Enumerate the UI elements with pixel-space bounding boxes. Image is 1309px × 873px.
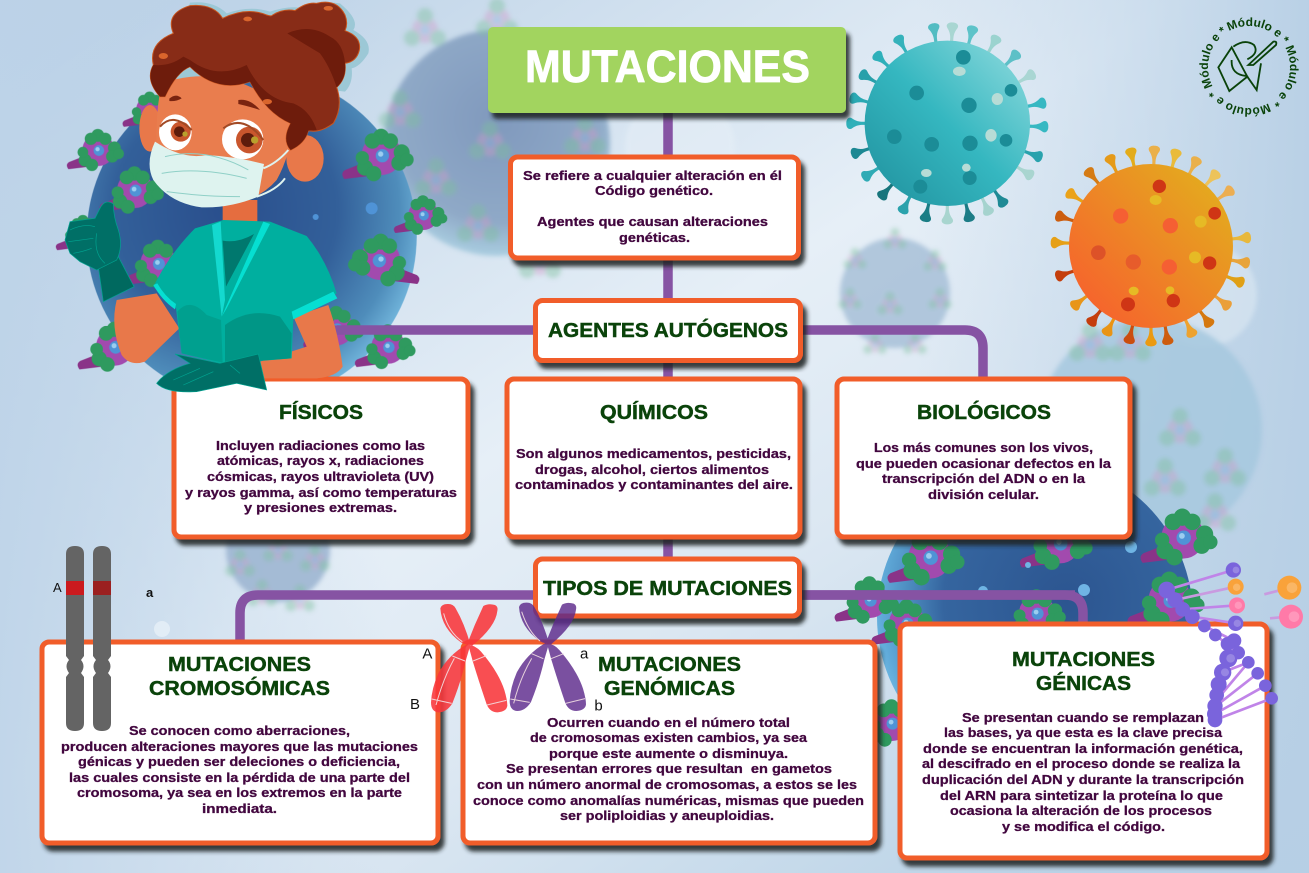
- panel: fisicos: FÍSICOS: [279, 401, 363, 424]
- virus: orange: [1050, 145, 1251, 346]
- icon: X chromosomes: A: [422, 645, 432, 662]
- eyes: [159, 114, 192, 150]
- panel: mutaciones genomicas: Ocurren cuando en el número total: [547, 715, 790, 730]
- neck: [223, 200, 257, 240]
- panel: definition: [510, 157, 798, 258]
- title box: MUTACIONES: [525, 41, 810, 92]
- mask: [150, 142, 264, 207]
- panel: mutaciones genomicas: Se presentan errores que resultan en gametos: [506, 761, 832, 776]
- icon: notebook and pen: [1218, 41, 1276, 91]
- panel: tipos de mutaciones heading: [536, 559, 800, 616]
- panel: mutaciones genicas: GÉNICAS: [1036, 672, 1131, 695]
- icon: DNA strand: [1158, 562, 1303, 727]
- eyebrows: [169, 96, 182, 101]
- panel: mutaciones genomicas: GENÓMICAS: [604, 676, 735, 700]
- logo: Módulo e: Módulo e *: [1226, 17, 1289, 42]
- panel: definition: Agentes que causan alteraciones: [537, 214, 768, 229]
- panel: mutaciones genomicas: de cromosomas existen cambios, ya sea: [530, 730, 808, 745]
- panel: mutaciones cromosomicas: CROMOSÓMICAS: [149, 676, 330, 700]
- panel: mutaciones genicas: del ARN para sintetizar la proteína lo que: [940, 788, 1223, 803]
- panel: mutaciones cromosomicas: génicas y pueden ser deleciones o deficiencia,: [78, 754, 400, 769]
- panel: quimicos: contaminados y contaminantes del aire.: [515, 477, 793, 492]
- panel: fisicos: y rayos gamma, así como temperaturas: [185, 485, 457, 500]
- logo: Módulo e: Módulo e *: [1209, 92, 1271, 117]
- character: nurse with mask: [65, 2, 369, 392]
- panel: biologicos: que pueden ocasionar defectos en la: [856, 456, 1112, 471]
- panel: mutaciones genomicas: MUTACIONES: [598, 654, 741, 676]
- panel: biologicos: Los más comunes son los vivos,: [874, 440, 1093, 455]
- connector lines: [240, 113, 1083, 642]
- panel: fisicos: [174, 379, 468, 537]
- panel: agentes autogenos heading: [536, 300, 800, 360]
- icon: straight chromosomes: [53, 546, 154, 731]
- panel: biologicos: transcripción del ADN o en la: [882, 471, 1086, 486]
- panel: mutaciones cromosomicas: MUTACIONES: [168, 654, 311, 676]
- panel: mutaciones genicas: Se presentan cuando se remplazan: [962, 710, 1204, 725]
- panel: biologicos: BIOLÓGICOS: [917, 400, 1051, 424]
- panel: definition: genéticas.: [619, 230, 690, 245]
- virus: teal: [846, 22, 1049, 224]
- panel: fisicos: atómicas, rayos x, radiaciones: [217, 453, 424, 468]
- thumbs up glove: [65, 202, 134, 302]
- logo: Módulo e: Módulo e *: [1199, 26, 1224, 89]
- panel: mutaciones cromosomicas: Se conocen como aberraciones,: [129, 723, 350, 738]
- icon: X chromosomes: a: [580, 645, 589, 662]
- panel: fisicos: Incluyen radiaciones como las: [216, 438, 425, 453]
- panel: mutaciones genicas: y se modifica el código.: [1002, 819, 1165, 834]
- face: [156, 76, 291, 207]
- lower glove: [157, 354, 267, 392]
- panel: mutaciones cromosomicas: las cuales consiste en la pérdida de una parte del: [69, 770, 410, 785]
- logo: Módulo e: Módulo e *: [1274, 45, 1299, 107]
- panel: definition: Código genético.: [595, 183, 713, 198]
- panel: quimicos: [507, 379, 800, 537]
- ear: [286, 135, 324, 182]
- panel: mutaciones cromosomicas: inmediata.: [202, 801, 277, 816]
- panel: mutaciones genomicas: con un número anormal de cromosomas, a estos se les: [477, 777, 857, 792]
- panel: quimicos: Son algunos medicamentos, pesticidas,: [516, 446, 791, 461]
- panel: fisicos: cósmicas, rayos ultravioleta (UV): [207, 469, 434, 484]
- panel: biologicos: división celular.: [928, 487, 1039, 502]
- panel: mutaciones cromosomicas: producen alteraciones mayores que las mutaciones: [61, 739, 418, 754]
- panel: biologicos: [837, 379, 1130, 537]
- panel: mutaciones genicas: [900, 624, 1267, 858]
- hair halo: [167, 2, 369, 92]
- panel: fisicos: y presiones extremas.: [244, 500, 397, 515]
- panel: tipos de mutaciones heading: TIPOS DE MUTACIONES: [543, 578, 792, 600]
- scrub top: [153, 220, 337, 364]
- virus sphere: bottom right: [835, 459, 1218, 775]
- arms: [114, 293, 343, 378]
- panel: mutaciones genicas: duplicación del ADN y durante la transcripción: [922, 772, 1244, 787]
- panel: quimicos: drogas, alcohol, ciertos alimentos: [535, 462, 769, 477]
- panel: mutaciones genicas: MUTACIONES: [1012, 649, 1155, 671]
- panel: quimicos: QUÍMICOS: [600, 401, 708, 424]
- hair: [150, 2, 360, 150]
- panel: mutaciones genomicas: conoce como anomalías numéricas, mismas que pueden: [473, 793, 864, 808]
- panel: mutaciones genicas: al descifrado en el proceso donde se realiza la: [922, 756, 1241, 771]
- icon: X chromosomes: [410, 603, 603, 714]
- icon: X chromosomes: b: [594, 697, 603, 714]
- panel: mutaciones cromosomicas: cromosoma, ya sea en los extremos en la parte: [77, 785, 402, 800]
- panel: mutaciones genicas: las bases, ya que esta es la clave precisa: [944, 725, 1223, 740]
- panel: mutaciones genicas: donde se encuentran la información genética,: [923, 741, 1243, 756]
- panel: agentes autogenos heading: AGENTES AUTÓGENOS: [548, 318, 788, 342]
- panel: mutaciones genomicas: ser poliploidias y aneuploidias.: [560, 808, 774, 823]
- panel: mutaciones cromosomicas: [42, 642, 438, 843]
- panel: definition: Se refiere a cualquier alteración en él: [523, 168, 782, 183]
- title box: [488, 27, 846, 113]
- icon: straight chromosomes: a: [146, 585, 154, 600]
- panel: mutaciones genicas: ocasiona la alteración de los procesos: [950, 803, 1212, 818]
- virus sphere: left: [56, 72, 447, 402]
- panel: mutaciones genomicas: porque este aumente o disminuya.: [549, 746, 788, 761]
- blurred background viruses: [225, 0, 1262, 611]
- icon: straight chromosomes: A: [53, 580, 62, 595]
- panel: mutaciones genomicas: [463, 642, 875, 843]
- logo: Módulo e: [1199, 17, 1299, 117]
- icon: X chromosomes: B: [410, 696, 420, 713]
